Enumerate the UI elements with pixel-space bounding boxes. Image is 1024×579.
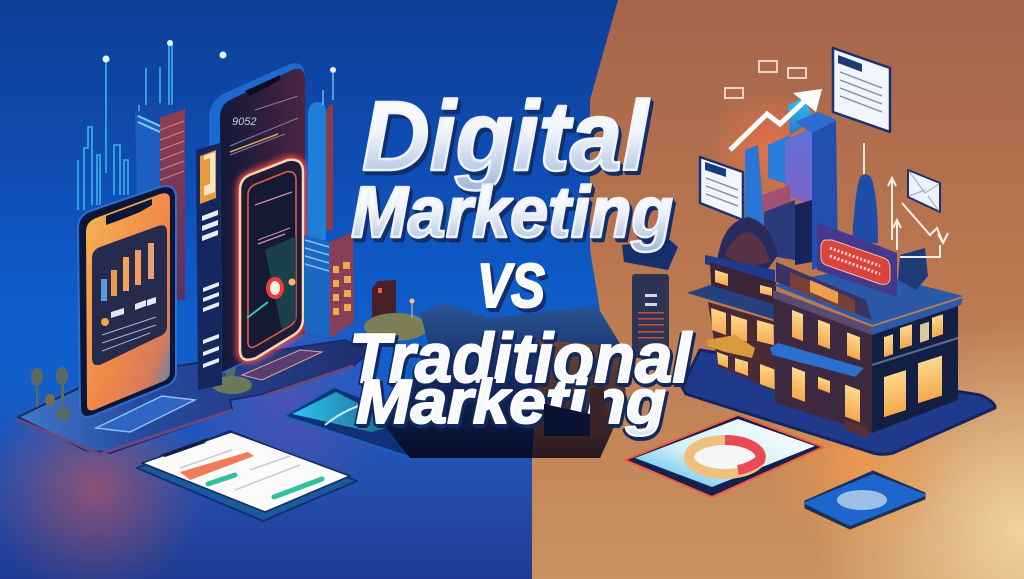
icon: neon skyline [78,40,336,210]
icon: growth arrow [730,89,822,150]
phone: tall neon phone [209,63,305,378]
awning [770,343,864,378]
illustration: traditional marketing storefront [625,48,995,529]
title line: Digital: Digital [362,81,650,191]
title line: Traditional: Traditional [349,319,692,397]
card: document left [700,157,743,220]
phone: lying phone with list [137,431,357,521]
icon: small folder glyphs [725,61,806,98]
keyboard panel [96,396,195,432]
title line: VS: VS [477,252,545,321]
background: traditional tan side [532,0,1024,579]
panel: side window column [196,143,222,390]
tablet: teal screen [284,387,420,458]
number on screen: 9052 [232,116,256,128]
title line: Marketing: Marketing [351,173,673,253]
building: left wing [687,217,779,392]
broken letter cover [544,388,604,436]
phone panel [632,274,669,358]
market stall [707,335,755,358]
icon: right tower [304,72,354,338]
sign: billboard [817,222,928,297]
icon: small trees [31,351,252,421]
phone: bar chart phone [78,186,176,417]
icon: central small buildings [364,280,428,341]
icon: blue city blocks [745,97,878,270]
card: document top right [833,48,890,132]
background: digital blue side [0,0,620,579]
shadow blob [622,240,678,270]
icon: envelope [908,170,940,212]
base platform [682,350,995,454]
illustration: digital marketing devices [18,40,428,521]
neon frame glow [240,160,303,360]
building: main [770,262,963,438]
right face windows [884,314,943,417]
tablet: small blue tile [805,471,925,529]
left face windows [792,310,860,422]
illustration: central dark block [384,240,678,458]
icon: small white arrows [888,178,948,257]
title line: Marketing second: Marketing [356,368,666,437]
icon: tower block [135,103,185,300]
base platform [18,340,370,453]
tablet: donut chart [625,415,823,497]
title [349,81,692,437]
icon: obelisk [852,174,878,243]
